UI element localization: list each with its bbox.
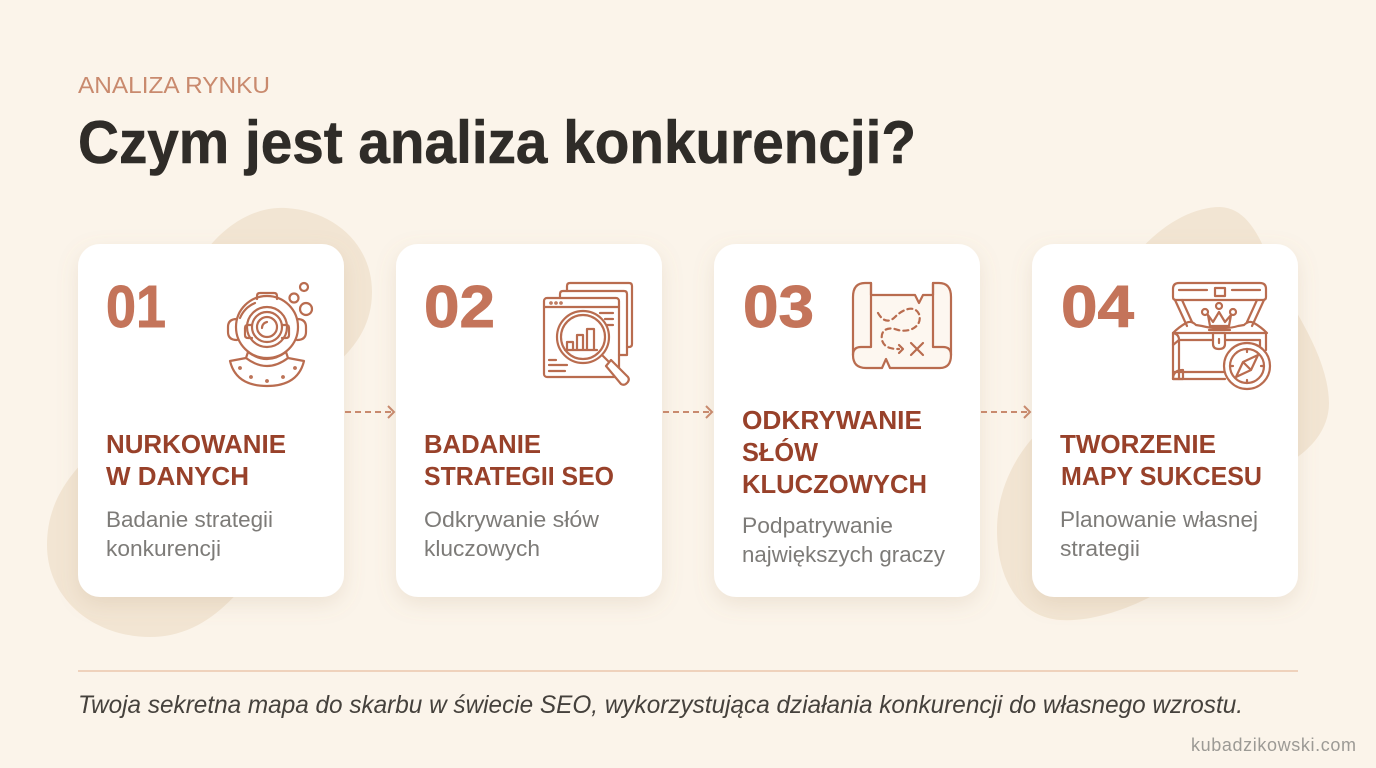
step 4 heading: MAPY SUKCESU — [1061, 461, 1262, 491]
background blob: top right of card 1 — [205, 208, 372, 365]
step 4 description: strategii — [1060, 536, 1140, 561]
step 1 number: 01 — [106, 274, 166, 340]
panel: step 1 — [78, 244, 344, 597]
step 2 number: 02 — [424, 274, 495, 340]
background blob: bottom left of card 1 — [47, 455, 240, 637]
step 3 description: największych graczy — [742, 542, 945, 567]
step 2 description: kluczowych — [424, 536, 540, 561]
panel: step 4 — [1032, 244, 1298, 597]
icon: browser pages with magnifier — [544, 283, 632, 385]
arrow: step 2 to 3 — [663, 406, 712, 418]
step 2 heading: BADANIE — [424, 429, 541, 459]
arrow: step 1 to 2 — [345, 406, 394, 418]
step 1 heading: W DANYCH — [106, 461, 249, 491]
source credit: kubadzikowski.com — [1191, 735, 1356, 755]
step 3 heading — [742, 405, 927, 499]
icon: treasure chest with crown and compass — [1173, 283, 1270, 389]
icon: treasure map — [853, 283, 951, 368]
step 2 heading: STRATEGII SEO — [424, 461, 614, 491]
step 3 heading: SŁÓW — [742, 437, 818, 467]
step 1 description — [106, 507, 273, 561]
step 3 heading: KLUCZOWYCH — [742, 469, 927, 499]
panel: step 3 — [714, 244, 980, 597]
step 2 description — [424, 507, 599, 561]
footer tagline: Twoja sekretna mapa do skarbu w świecie SEO, wykorzystująca działania konkurencji do własnego wzrostu. — [78, 691, 1243, 719]
step 1 description: Badanie strategii — [106, 507, 273, 532]
background blob: behind card 4 — [997, 207, 1329, 620]
panel: step 2 — [396, 244, 662, 597]
arrow: step 3 to 4 — [981, 406, 1030, 418]
step 3 description: Podpatrywanie — [742, 513, 893, 538]
step 4 heading — [1060, 429, 1262, 491]
step 3 description — [742, 513, 945, 567]
icon: diving helmet — [228, 283, 312, 386]
step 4 number: 04 — [1061, 274, 1134, 340]
step 2 description: Odkrywanie słów — [424, 507, 599, 532]
title: Czym jest analiza konkurencji? — [78, 109, 916, 176]
step 4 description — [1060, 507, 1258, 561]
step 4 heading: TWORZENIE — [1060, 429, 1216, 459]
step 1 description: konkurencji — [106, 536, 221, 561]
step 1 heading: NURKOWANIE — [106, 429, 286, 459]
step 2 heading — [424, 429, 614, 491]
eyebrow label: ANALIZA RYNKU — [78, 72, 270, 98]
step 4 description: Planowanie własnej — [1060, 507, 1258, 532]
step 3 heading: ODKRYWANIE — [742, 405, 922, 435]
step 1 heading — [106, 429, 286, 491]
step 3 number: 03 — [743, 274, 814, 340]
